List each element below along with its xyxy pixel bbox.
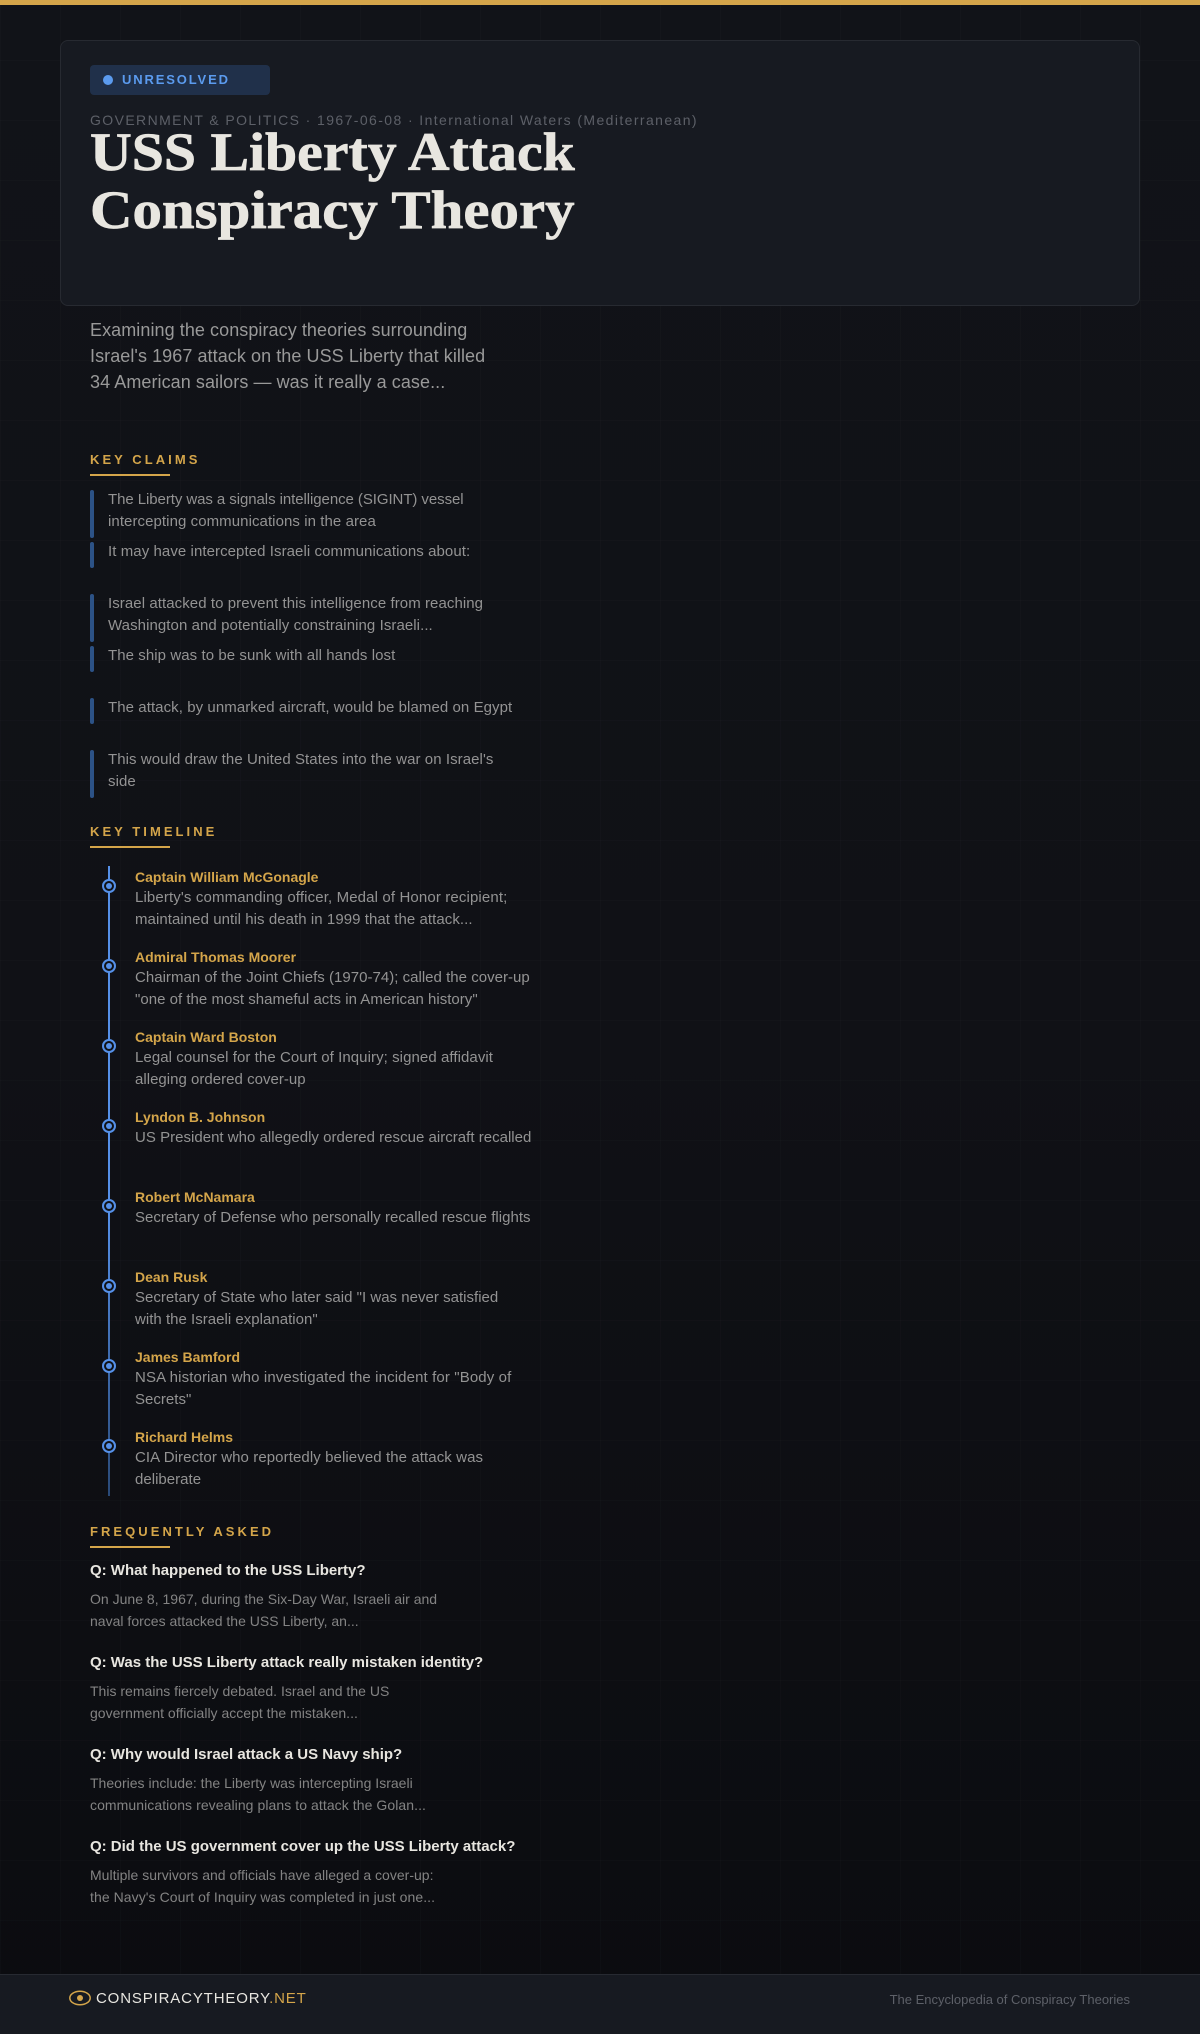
timeline line xyxy=(108,866,110,1496)
event: Moorer xyxy=(102,949,530,1008)
claim 5 xyxy=(90,698,512,724)
event: Rusk: with the Israeli explanation" xyxy=(135,1311,318,1328)
claim 3: Israel attacked to prevent this intelligence from reaching xyxy=(108,595,483,612)
FAQ 3: Q: Why would Israel attack a US Navy ship? xyxy=(90,1746,402,1763)
event: Moorer: Admiral Thomas Moorer xyxy=(135,949,296,965)
event: Moorer: "one of the most shameful acts in American history" xyxy=(135,991,478,1008)
event: Johnson xyxy=(102,1109,531,1146)
event: Rusk: Secretary of State who later said "I was never satisfied xyxy=(135,1289,498,1306)
claim 6: This would draw the United States into the war on Israel's xyxy=(108,751,493,768)
FAQ 2: This remains fiercely debated. Israel and the US xyxy=(90,1683,389,1699)
claim 3: Washington and potentially constraining Israeli... xyxy=(108,617,433,634)
FAQ 1: On June 8, 1967, during the Six-Day War, Israeli air and xyxy=(90,1591,437,1607)
badge label: UNRESOLVED xyxy=(122,72,230,87)
event: Boston xyxy=(102,1029,493,1088)
FAQ 1: naval forces attacked the USS Liberty, an... xyxy=(90,1613,359,1629)
claim 5: The attack, by unmarked aircraft, would be blamed on Egypt xyxy=(108,699,512,716)
claims list xyxy=(90,490,512,798)
heading: key claims: KEY CLAIMS xyxy=(90,452,200,467)
heading: key timeline: KEY TIMELINE xyxy=(90,824,217,839)
claim 4: The ship was to be sunk with all hands lost xyxy=(108,647,395,664)
footer wordmark: CONSPIRACYTHEORY.NET xyxy=(96,1990,307,2007)
intro text xyxy=(90,320,485,392)
FAQ 1 xyxy=(90,1562,437,1629)
event: Rusk: Dean Rusk xyxy=(135,1269,207,1285)
event: Bamford: Secrets" xyxy=(135,1391,191,1408)
event: Boston: Legal counsel for the Court of Inquiry; signed affidavit xyxy=(135,1049,493,1066)
event: McGonagle: maintained until his death in 1999 that the attack... xyxy=(135,911,473,928)
event: Bamford xyxy=(102,1349,512,1408)
claim 2 xyxy=(90,542,470,568)
event: McGonagle: Captain William McGonagle xyxy=(135,869,318,885)
FAQ 4: Q: Did the US government cover up the USS Liberty attack? xyxy=(90,1838,515,1855)
event: McGonagle xyxy=(102,869,507,928)
event: McGonagle: Liberty's commanding officer, Medal of Honor recipient; xyxy=(135,889,507,906)
event: McNamara: Robert McNamara xyxy=(135,1189,255,1205)
claim 1: intercepting communications in the area xyxy=(108,513,376,530)
event: Helms: CIA Director who reportedly believed the attack was xyxy=(135,1449,483,1466)
event: Bamford: NSA historian who investigated the incident for "Body of xyxy=(135,1369,511,1386)
claim 2: It may have intercepted Israeli communications about: xyxy=(108,543,470,560)
FAQ 4: the Navy's Court of Inquiry was completed in just one... xyxy=(90,1889,435,1905)
claim 3 xyxy=(90,594,483,642)
FAQ 2 xyxy=(90,1654,483,1721)
title: Conspiracy Theory xyxy=(90,180,575,240)
event: Moorer: Chairman of the Joint Chiefs (1970-74); called the cover-up xyxy=(135,969,530,986)
header panel xyxy=(60,40,1140,306)
FAQ 1: Q: What happened to the USS Liberty? xyxy=(90,1562,365,1579)
meta line: GOVERNMENT & POLITICS · 1967-06-08 · International Waters (Mediterranean) xyxy=(90,112,698,128)
FAQ 4: Multiple survivors and officials have alleged a cover-up: xyxy=(90,1867,434,1883)
event: Rusk xyxy=(102,1269,498,1328)
FAQ list xyxy=(90,1562,515,1905)
event: Helms xyxy=(102,1429,483,1488)
title: USS Liberty Attack xyxy=(90,122,575,182)
footer xyxy=(0,1974,1200,2034)
claim 6: side xyxy=(108,773,136,790)
FAQ 4 xyxy=(90,1838,515,1905)
claim 1 xyxy=(90,490,464,538)
event: Boston: alleging ordered cover-up xyxy=(135,1071,306,1088)
intro text: 34 American sailors — was it really a case... xyxy=(90,372,445,392)
event: Boston: Captain Ward Boston xyxy=(135,1029,277,1045)
claim 4 xyxy=(90,646,396,672)
timeline xyxy=(102,866,531,1496)
event: Helms: deliberate xyxy=(135,1471,201,1488)
claim 1: The Liberty was a signals intelligence (SIGINT) vessel xyxy=(108,491,464,508)
event: Johnson: Lyndon B. Johnson xyxy=(135,1109,265,1125)
status badge xyxy=(90,65,270,95)
FAQ 3: Theories include: the Liberty was intercepting Israeli xyxy=(90,1775,413,1791)
icon: eye logo xyxy=(69,1990,91,2006)
intro text: Israel's 1967 attack on the USS Liberty that killed xyxy=(90,346,485,366)
event: McNamara: Secretary of Defense who personally recalled rescue flights xyxy=(135,1209,531,1226)
event: Johnson: US President who allegedly ordered rescue aircraft recalled xyxy=(135,1129,531,1146)
claim 6 xyxy=(90,750,493,798)
heading: frequently asked: FREQUENTLY ASKED xyxy=(90,1524,274,1539)
title xyxy=(90,122,576,240)
footer tagline: The Encyclopedia of Conspiracy Theories xyxy=(890,1992,1130,2007)
event: Bamford: James Bamford xyxy=(135,1349,240,1365)
FAQ 3: communications revealing plans to attack the Golan... xyxy=(90,1797,426,1813)
badge dot xyxy=(103,75,113,85)
FAQ 3 xyxy=(90,1746,426,1813)
event: Helms: Richard Helms xyxy=(135,1429,233,1445)
FAQ 2: government officially accept the mistaken... xyxy=(90,1705,358,1721)
event: McNamara xyxy=(102,1189,531,1226)
top accent bar xyxy=(0,0,1200,5)
FAQ 2: Q: Was the USS Liberty attack really mistaken identity? xyxy=(90,1654,483,1671)
intro text: Examining the conspiracy theories surrounding xyxy=(90,320,467,340)
